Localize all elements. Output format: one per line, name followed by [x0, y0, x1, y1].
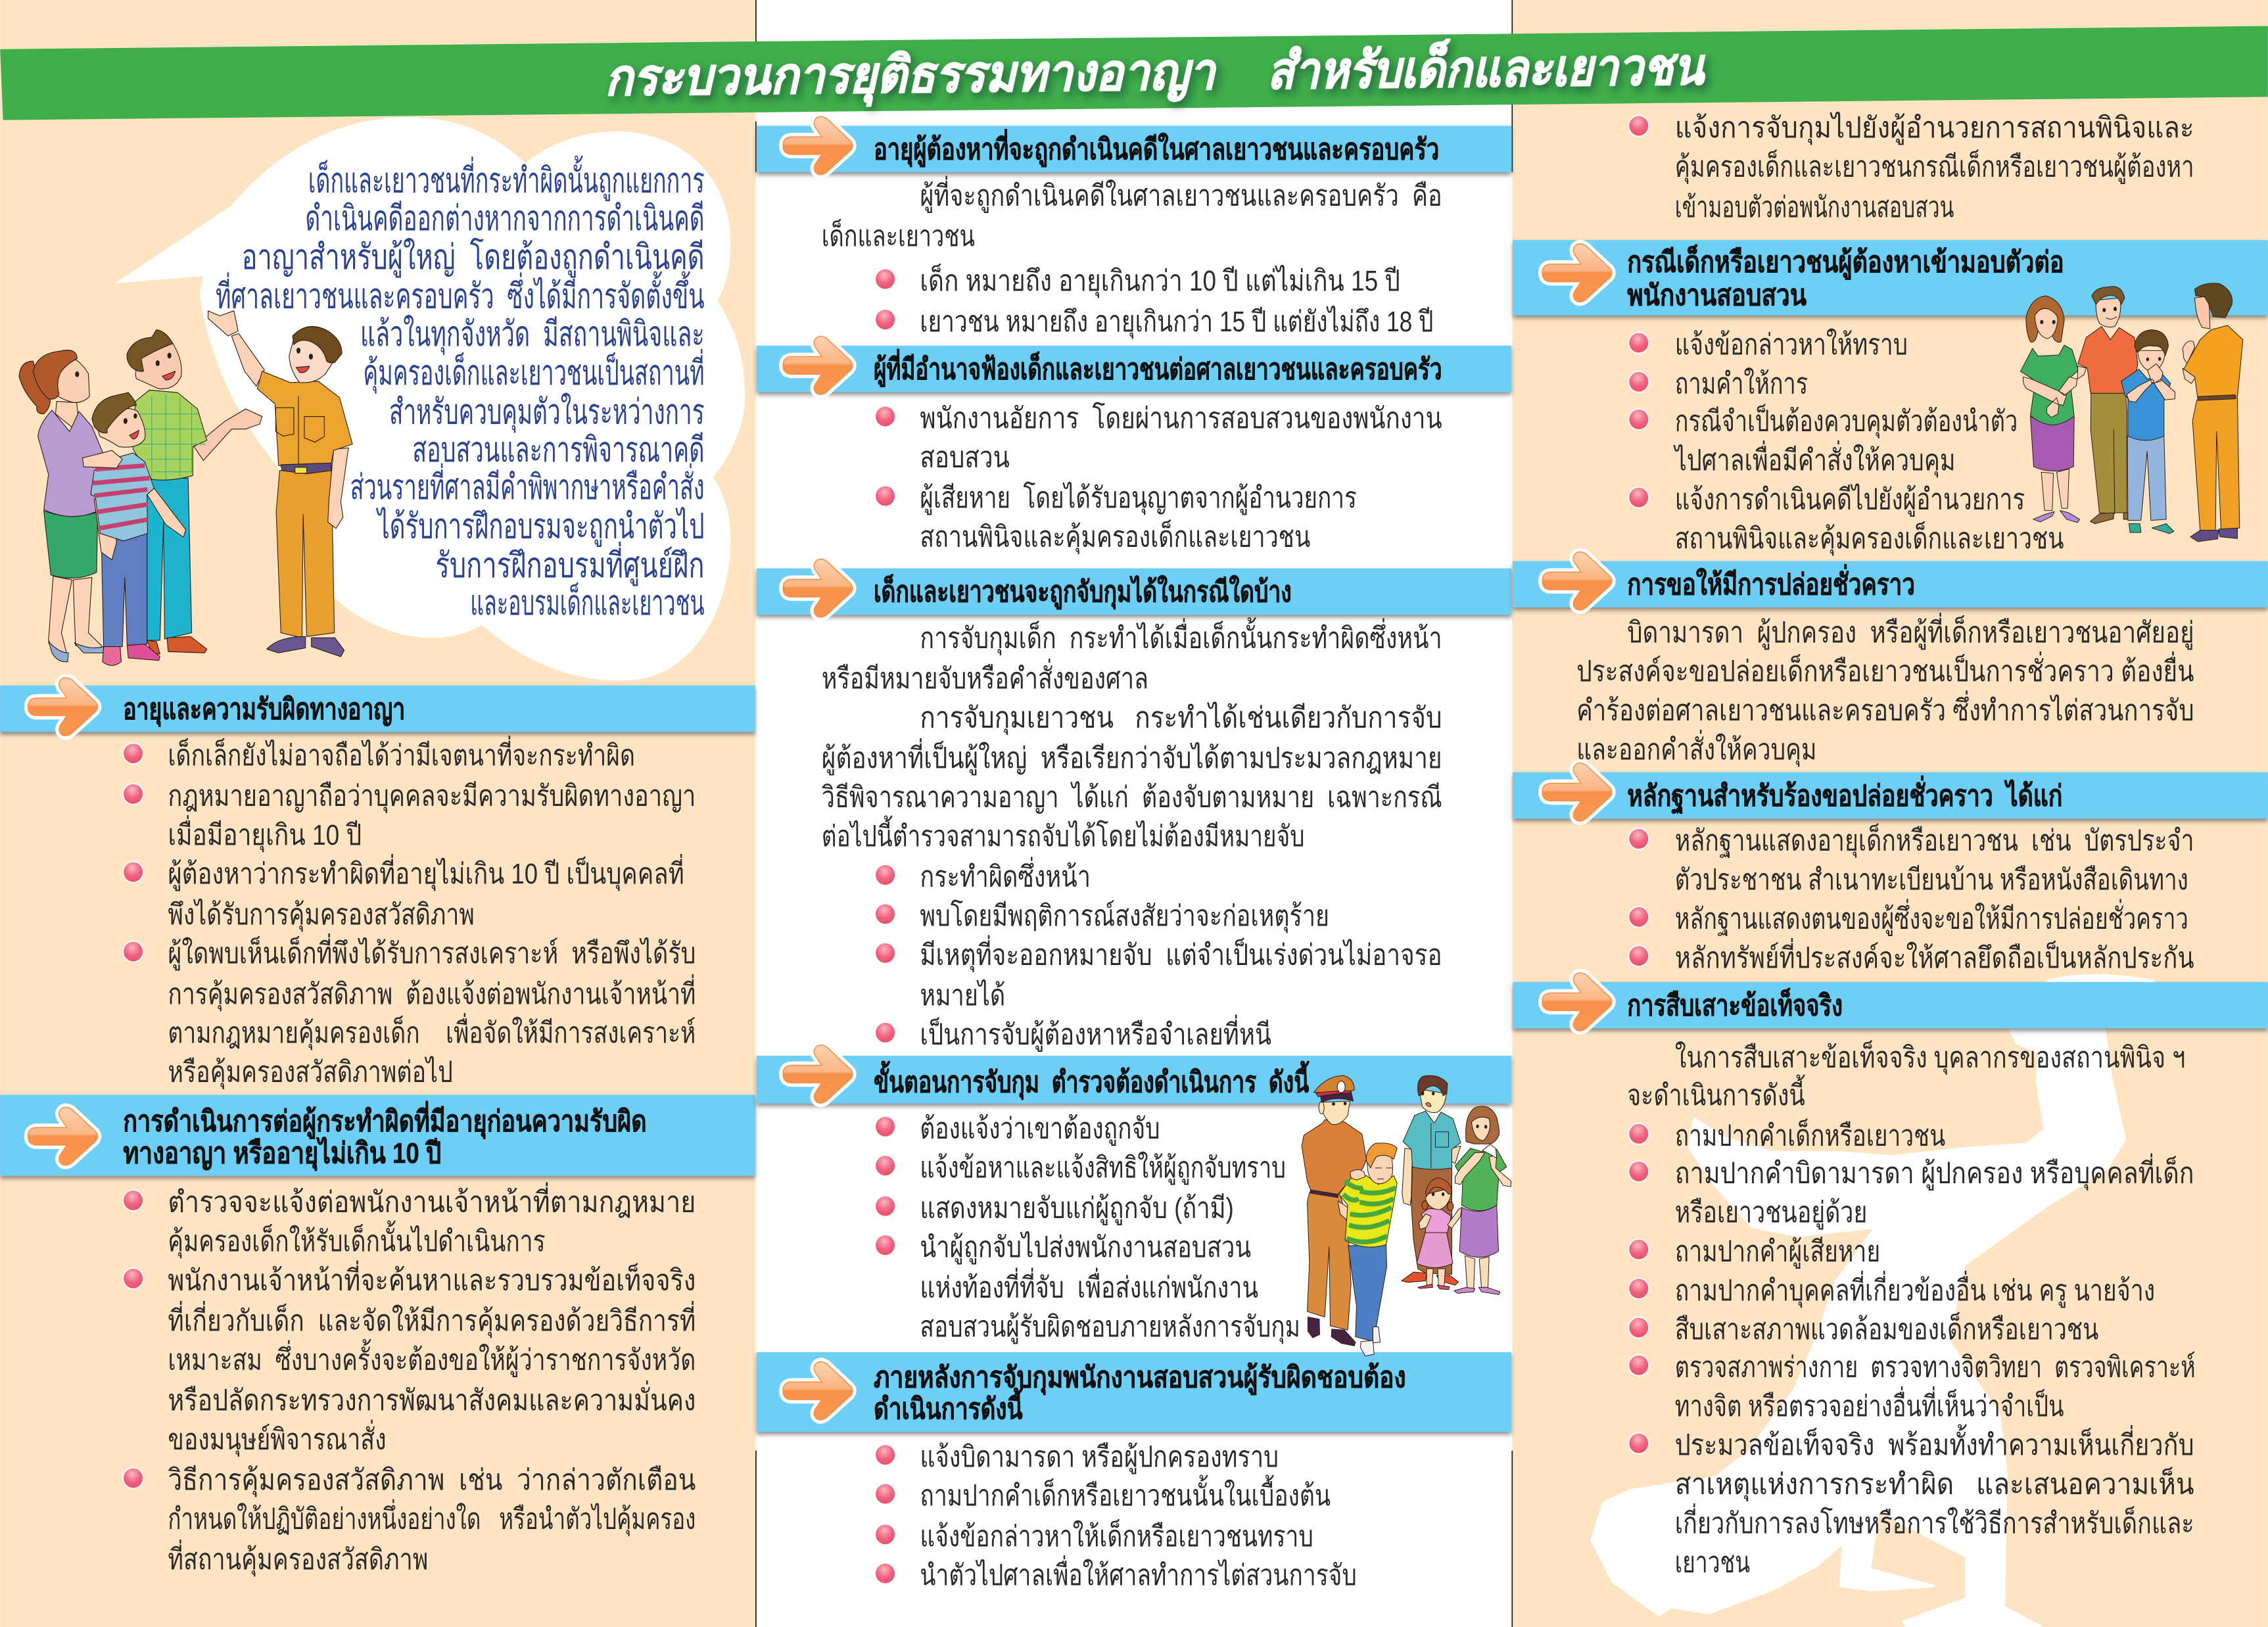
list: arrest procedure: นำผู้ถูกจับไปส่งพนักงานสอบสวน — [920, 1231, 1251, 1265]
list: self-surrender: กรณีจำเป็นต้องควบคุมตัวต้องนำตัว — [1675, 404, 2018, 439]
list: fact-finding: จะดำเนินการดังนี้ — [1627, 1074, 1805, 1112]
list: handling steps — [122, 1182, 696, 1577]
list: criminal responsibility: การคุ้มครองสวัสดิภาพ ต้องแจ้งต่อพนักงานเจ้าหน้าที่ — [168, 974, 696, 1012]
list: handling steps: วิธีการคุ้มครองสวัสดิภาพ เช่น ว่ากล่าวตักเตือน — [168, 1464, 696, 1497]
background: right peach column — [1512, 0, 2268, 1627]
list: criminal responsibility: กฎหมายอาญาถือว่าบุคคลจะมีความรับผิดทางอาญา — [168, 780, 696, 813]
text and list: arrest conditions: การจับกุมเด็ก กระทำได้เมื่อเด็กนั้นกระทำผิดซึ่งหน้า — [920, 617, 1442, 656]
background: left peach column — [0, 0, 756, 1627]
heading: handling offenders under age: ทางอาญา หรืออายุไม่เกิน 10 ปี — [123, 1136, 441, 1171]
list: criminal responsibility: ตามกฎหมายคุ้มครองเด็ก เพื่อจัดให้มีการสงเคราะห์ — [168, 1012, 696, 1050]
list: handling steps: เหมาะสม ซึ่งบางครั้งจะต้องขอให้ผู้ว่าราชการจังหวัด — [168, 1338, 696, 1377]
title text: สำหรับเด็กและเยาวชน — [1267, 36, 1706, 99]
icon: arrow — [1542, 763, 1612, 821]
text and list: arrest conditions: มีเหตุที่จะออกหมายจับ แต่จำเป็นเร่งด่วนไม่อาจรอ — [920, 934, 1442, 972]
bubble text: ได้รับการฝึกอบรมจะถูกนำตัวไป — [376, 506, 705, 547]
list: children and youth definition: ผู้ที่จะถูกดำเนินคดีในศาลเยาวชนและครอบครัว คือ — [920, 175, 1442, 213]
list: criminal responsibility — [122, 735, 696, 1090]
panel: middle column — [783, 116, 1442, 1592]
text block: temporary release: และออกคำสั่งให้ควบคุม — [1576, 729, 1816, 767]
bubble text: ดำเนินคดีออกต่างหากจากการดำเนินคดี — [305, 199, 705, 238]
heading: who may sue: ผู้ที่มีอำนาจฟ้องเด็กและเยาวชนต่อศาลเยาวชนและครอบครัว — [874, 348, 1442, 387]
heading: fact-finding: การสืบเสาะข้อเท็จจริง — [1627, 987, 1843, 1022]
list: handling steps: คุ้มครองเด็กให้รับเด็กนั้นไปดำเนินการ — [168, 1220, 546, 1259]
list: prosecutors and injured: ผู้เสียหาย โดยได้รับอนุญาตจากผู้อำนวยการ — [920, 481, 1357, 515]
list: handling steps: ตำรวจจะแจ้งต่อพนักงานเจ้าหน้าที่ตามกฎหมาย — [168, 1182, 696, 1219]
list: criminal responsibility: ผู้ใดพบเห็นเด็กที่พึงได้รับการสงเคราะห์ หรือพึงได้รับ — [168, 933, 696, 971]
icon: arrow — [28, 678, 97, 736]
list: notification — [1628, 111, 2194, 224]
heading: self-surrender — [1627, 245, 2064, 312]
list: handling steps: ที่สถานคุ้มครองสวัสดิภาพ — [168, 1539, 428, 1577]
illustration: police arrest with family — [1302, 1075, 1511, 1356]
list: fact-finding: ถามปากคำบุคคลที่เกี่ยวข้องอื่น เช่น ครู นายจ้าง — [1675, 1270, 2155, 1308]
icon: arrow — [783, 1362, 853, 1420]
list: after arrest — [874, 1441, 1357, 1592]
panel: right column — [1542, 111, 2196, 1578]
panel: left column — [28, 678, 696, 1577]
bubble text: คุ้มครองเด็กและเยาวชนเป็นสถานที่ — [363, 348, 705, 394]
text and list: arrest conditions: ผู้ต้องหาที่เป็นผู้ใหญ่ หรือเรียกว่าจับได้ตามประมวลกฎหมาย — [822, 738, 1442, 776]
list: criminal responsibility: หรือคุ้มครองสวัสดิภาพต่อไป — [168, 1056, 453, 1090]
bubble text — [216, 156, 705, 623]
list: prosecutors and injured: สอบสวน — [920, 442, 1010, 474]
heading: temporary release: การขอให้มีการปล่อยชั่วคราว — [1627, 564, 1915, 601]
list: arrest procedure — [874, 1112, 1300, 1344]
list: evidence — [1628, 824, 2194, 974]
bubble text: รับการฝึกอบรมที่ศูนย์ฝึก — [435, 541, 705, 586]
list: self-surrender — [1628, 328, 2064, 556]
heading: when arrest allowed: เด็กและเยาวชนจะถูกจับกุมได้ในกรณีใดบ้าง — [874, 574, 1292, 610]
bubble text: อาญาสำหรับผู้ใหญ่ โดยต้องถูกดำเนินคดี — [242, 237, 705, 278]
list: handling steps: หรือปลัดกระทรวงการพัฒนาสังคมและความมั่นคง — [168, 1380, 696, 1417]
text and list: arrest conditions: พบโดยมีพฤติการณ์สงสัยว่าจะก่อเหตุร้าย — [920, 899, 1329, 933]
list: children and youth definition: เด็กและเยาวชน — [822, 219, 975, 252]
title text — [604, 36, 1706, 110]
text and list: arrest conditions: หมายได้ — [920, 979, 1005, 1012]
list: fact-finding — [1627, 1041, 2196, 1578]
list: arrest procedure: แห่งท้องที่ที่จับ เพื่อส่งแก่พนักงาน — [920, 1267, 1258, 1304]
speech bubble — [114, 117, 745, 680]
list: fact-finding: ประมวลข้อเท็จจริง พร้อมทั้งทำความเห็นเกี่ยวกับ — [1675, 1424, 2194, 1461]
heading: after arrest — [874, 1361, 1406, 1425]
list: arrest procedure: สอบสวนผู้รับผิดชอบภายหลังการจับกุม — [920, 1311, 1300, 1344]
icon: arrow — [1542, 552, 1612, 610]
list: self-surrender: ถามคำให้การ — [1675, 367, 1808, 400]
list: arrest procedure: แจ้งข้อหาและแจ้งสิทธิให้ผู้ถูกจับทราบ — [920, 1151, 1286, 1185]
list: prosecutors and injured — [874, 402, 1442, 555]
heading: handling offenders under age: การดำเนินการต่อผู้กระทำผิดที่มีอายุก่อนความรับผิด — [123, 1100, 647, 1139]
list: self-surrender: ไปศาลเพื่อมีคำสั่งให้ควบคุม — [1673, 440, 1956, 478]
list: criminal responsibility: เมื่อมีอายุเกิน 10 ปี — [168, 814, 362, 853]
list: self-surrender: แจ้งการดำเนินคดีไปยังผู้อำนวยการ — [1675, 483, 2025, 517]
list: handling steps: พนักงานเจ้าหน้าที่จะค้นหาและรวบรวมข้อเท็จจริง — [168, 1260, 696, 1296]
list: after arrest: ถามปากคำเด็กหรือเยาวชนนั้นในเบื้องต้น — [920, 1474, 1331, 1512]
list: notification: แจ้งการจับกุมไปยังผู้อำนวยการสถานพินิจและ — [1675, 111, 2194, 145]
icon: arrow — [783, 337, 853, 394]
illustration: family greeting officer — [2021, 283, 2243, 542]
silhouette: white figure behind right column text — [1592, 976, 2153, 1627]
bubble text: สำหรับควบคุมตัวในระหว่างการ — [389, 392, 705, 433]
icon: arrow — [783, 116, 853, 175]
list: children and youth definition: เยาวชน หมายถึง อายุเกินกว่า 15 ปี แต่ยังไม่ถึง 18 ปี — [920, 305, 1433, 339]
heading: after arrest: ภายหลังการจับกุมพนักงานสอบสวนผู้รับผิดชอบต้อง — [874, 1361, 1406, 1396]
text and list: arrest conditions: การจับกุมเยาวชน กระทำได้เช่นเดียวกับการจับ — [920, 701, 1442, 736]
title banner — [0, 26, 2268, 120]
list: fact-finding: ทางจิต หรือตรวจอย่างอื่นที่เห็นว่าจำเป็น — [1675, 1386, 2064, 1423]
icon: arrow — [783, 559, 853, 617]
list: fact-finding: ถามปากคำเด็กหรือเยาวชน — [1675, 1118, 1945, 1152]
list: after arrest: แจ้งข้อกล่าวหาให้เด็กหรือเยาวชนทราบ — [920, 1519, 1313, 1553]
bubble text: ส่วนรายที่ศาลมีคำพิพากษาหรือคำสั่ง — [350, 463, 705, 507]
list: handling steps: ของมนุษย์พิจารณาสั่ง — [168, 1419, 387, 1457]
heading: evidence: หลักฐานสำหรับร้องขอปล่อยชั่วคราว ได้แก่ — [1627, 775, 2062, 814]
list: children and youth definition: เด็ก หมายถึง อายุเกินกว่า 10 ปี แต่ไม่เกิน 15 ปี — [920, 264, 1400, 298]
heading: self-surrender: พนักงานสอบสวน — [1627, 279, 1807, 312]
illustration: family with officer — [19, 311, 352, 665]
title text: กระบวนการยุติธรรมทางอาญา — [604, 43, 1217, 110]
panel: header bars right — [1513, 240, 2268, 1028]
heading: arrest procedure: ขั้นตอนการจับกุม ตำรวจต้องดำเนินการ ดังนี้ — [874, 1060, 1310, 1100]
heading: handling offenders under age — [123, 1100, 647, 1171]
icon: arrow — [783, 1045, 853, 1103]
text and list: arrest conditions: ต่อไปนี้ตำรวจสามารถจับได้โดยไม่ต้องมีหมายจับ — [822, 815, 1305, 853]
list: handling steps: ที่เกี่ยวกับเด็ก และจัดให้มีการคุ้มครองด้วยวิธีการที่ — [168, 1300, 696, 1338]
icon: arrow — [1542, 244, 1612, 302]
bubble text: และอบรมเด็กและเยาวชน — [470, 582, 705, 623]
list: prosecutors and injured: พนักงานอัยการ โดยผ่านการสอบสวนของพนักงาน — [920, 402, 1442, 435]
bubble text: สอบสวนและการพิจารณาคดี — [412, 431, 705, 469]
text and list: arrest conditions: หรือมีหมายจับหรือคำสั่งของศาล — [822, 658, 1148, 695]
text and list: arrest conditions: วิธีพิจารณาความอาญา ได้แก่ ต้องจับตามหมาย เฉพาะกรณี — [822, 781, 1442, 814]
text and list: arrest conditions: กระทำผิดซึ่งหน้า — [920, 857, 1091, 893]
list: arrest procedure: แสดงหมายจับแก่ผู้ถูกจับ (ถ้ามี) — [920, 1192, 1234, 1225]
list: self-surrender: แจ้งข้อกล่าวหาให้ทราบ — [1675, 328, 1908, 361]
list: fact-finding: หรือเยาวชนอยู่ด้วย — [1675, 1196, 1867, 1230]
icon: arrow — [1542, 973, 1612, 1031]
list: handling steps: กำหนดให้ปฏิบัติอย่างหนึ่งอย่างใด หรือนำตัวไปคุ้มครอง — [168, 1498, 696, 1536]
list: fact-finding: สืบเสาะสภาพแวดล้อมของเด็กหรือเยาวชน — [1675, 1312, 2098, 1346]
list: children and youth definition — [822, 175, 1442, 339]
icon: arrow — [28, 1107, 97, 1166]
bubble text: แล้วในทุกจังหวัด มีสถานพินิจและ — [360, 314, 705, 355]
heading: age and responsibility: อายุและความรับผิดทางอาญา — [123, 693, 405, 727]
bubble text: ที่ศาลเยาวชนและครอบครัว ซึ่งได้มีการจัดตั้งขึ้น — [216, 271, 705, 316]
list: fact-finding: เยาวชน — [1675, 1546, 1750, 1578]
bubble text: เด็กและเยาวชนที่กระทำผิดนั้นถูกแยกการ — [308, 156, 705, 202]
text and list: arrest conditions — [822, 617, 1442, 1052]
heading: age of accused: อายุผู้ต้องหาที่จะถูกดำเนินคดีในศาลเยาวชนและครอบครัว — [874, 129, 1439, 168]
list: arrest procedure: ต้องแจ้งว่าเขาต้องถูกจับ — [920, 1112, 1160, 1146]
text and list: arrest conditions: เป็นการจับผู้ต้องหาหรือจำเลยที่หนี — [920, 1014, 1271, 1052]
panel: header bars middle — [757, 126, 1511, 1432]
heading: self-surrender: กรณีเด็กหรือเยาวชนผู้ต้องหาเข้ามอบตัวต่อ — [1627, 245, 2064, 280]
list: criminal responsibility: พึงได้รับการคุ้มครองสวัสดิภาพ — [168, 898, 475, 932]
list: criminal responsibility: เด็กเล็กยังไม่อาจถือได้ว่ามีเจตนาที่จะกระทำผิด — [168, 735, 635, 772]
text block: temporary release — [1576, 612, 2194, 767]
list: fact-finding: ถามปากคำผู้เสียหาย — [1675, 1235, 1880, 1269]
list: notification: เข้ามอบตัวต่อพนักงานสอบสวน — [1675, 191, 1954, 224]
list: prosecutors and injured: สถานพินิจและคุ้มครองเด็กและเยาวชน — [920, 520, 1310, 555]
list: after arrest: นำตัวไปศาลเพื่อให้ศาลทำการไต่สวนการจับ — [920, 1555, 1357, 1592]
list: fact-finding: สาเหตุแห่งการกระทำผิด และเสนอความเห็น — [1675, 1467, 2194, 1502]
panel: header bars left — [0, 686, 755, 1176]
list: criminal responsibility: ผู้ต้องหาว่ากระทำผิดที่อายุไม่เกิน 10 ปี เป็นบุคคลที่ — [168, 853, 684, 891]
list: self-surrender: สถานพินิจและคุ้มครองเด็กและเยาวชน — [1675, 521, 2064, 556]
list: after arrest: แจ้งบิดามารดา หรือผู้ปกครองทราบ — [920, 1441, 1279, 1474]
list: fact-finding: ถามปากคำบิดามารดา ผู้ปกครอง หรือบุคคลที่เด็ก — [1675, 1153, 2194, 1191]
heading: after arrest: ดำเนินการดังนี้ — [874, 1387, 1024, 1425]
background: middle white column — [756, 0, 1512, 1627]
